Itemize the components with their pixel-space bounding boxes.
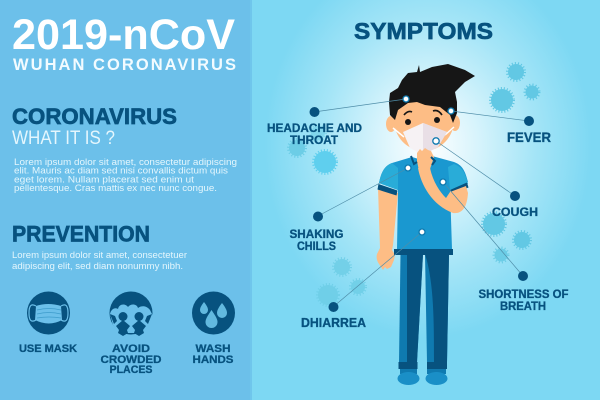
icon: crowded people bbox=[110, 292, 153, 336]
heading: symptoms: SYMPTOMS bbox=[354, 18, 493, 44]
character legs bbox=[398, 254, 449, 385]
label dots bbox=[310, 107, 534, 312]
character shirt bbox=[378, 156, 468, 255]
text block: prevention description: Lorem ipsum dolor sit amet, consectetuer bbox=[12, 250, 187, 261]
label: shaking chills: SHAKING bbox=[290, 229, 344, 241]
panel: left information column bbox=[0, 0, 250, 400]
label: headache and throat: THROAT bbox=[290, 135, 338, 147]
heading: prevention: PREVENTION bbox=[12, 222, 150, 246]
virus particles bbox=[289, 64, 538, 305]
connector lines bbox=[314, 99, 529, 307]
text block: description bbox=[14, 157, 237, 194]
character collar bbox=[411, 156, 435, 165]
label: use mask: USE MASK bbox=[19, 343, 77, 355]
label: shortness of breath: BREATH bbox=[500, 301, 546, 313]
text block: description: Lorem ipsum dolor sit amet, consectetur adipiscing bbox=[14, 157, 237, 168]
heading: coronavirus: CORONAVIRUS bbox=[12, 104, 177, 129]
label: fever: FEVER bbox=[507, 129, 551, 145]
label: avoid crowded places bbox=[100, 343, 162, 376]
label: shortness of breath: SHORTNESS OF bbox=[478, 289, 568, 301]
label: avoid crowded places: CROWDED bbox=[100, 354, 162, 366]
label: headache and throat bbox=[267, 123, 362, 147]
icon: water drops bbox=[192, 292, 235, 334]
character hand bbox=[417, 148, 434, 171]
label: wash hands: WASH bbox=[196, 343, 231, 355]
text block: description: elit. Mauris ac diam sed nisi convallis dictum quis bbox=[14, 166, 228, 177]
character head bbox=[386, 64, 475, 151]
label: headache and throat: HEADACHE AND bbox=[267, 123, 362, 135]
text block: description: eget lorem. Nullam placerat sed enim ut bbox=[14, 175, 194, 186]
label: diarrhea: DHIARREA bbox=[301, 316, 366, 330]
character left arm bbox=[377, 188, 398, 270]
label: shaking chills: CHILLS bbox=[297, 241, 336, 253]
label: wash hands bbox=[192, 343, 234, 366]
subtitle: WUHAN CORONAVIRUS bbox=[13, 56, 236, 74]
label: avoid crowded places: AVOID bbox=[112, 343, 150, 355]
title: 2019-nCoV bbox=[12, 11, 235, 59]
label: cough: COUGH bbox=[492, 205, 538, 219]
label: wash hands: HANDS bbox=[192, 354, 234, 366]
label: avoid crowded places: PLACES bbox=[110, 364, 152, 376]
label: shaking chills bbox=[290, 229, 344, 253]
text block: prevention description: adipiscing elit, sed diam nonummy nibh. bbox=[12, 261, 183, 272]
character: man with face mask bbox=[377, 64, 475, 385]
icon: face mask bbox=[27, 292, 70, 334]
character right arm bbox=[418, 168, 468, 213]
text block: description: pellentesque. Cras mattis ex nec nunc congue. bbox=[14, 183, 217, 194]
subheading: what it is: WHAT IT IS ? bbox=[12, 128, 115, 149]
panel: symptoms background bbox=[250, 0, 600, 400]
label: shortness of breath bbox=[478, 289, 568, 313]
anchor dots on body bbox=[403, 96, 454, 235]
text block: prevention description bbox=[12, 250, 187, 272]
character mask bbox=[393, 123, 454, 155]
